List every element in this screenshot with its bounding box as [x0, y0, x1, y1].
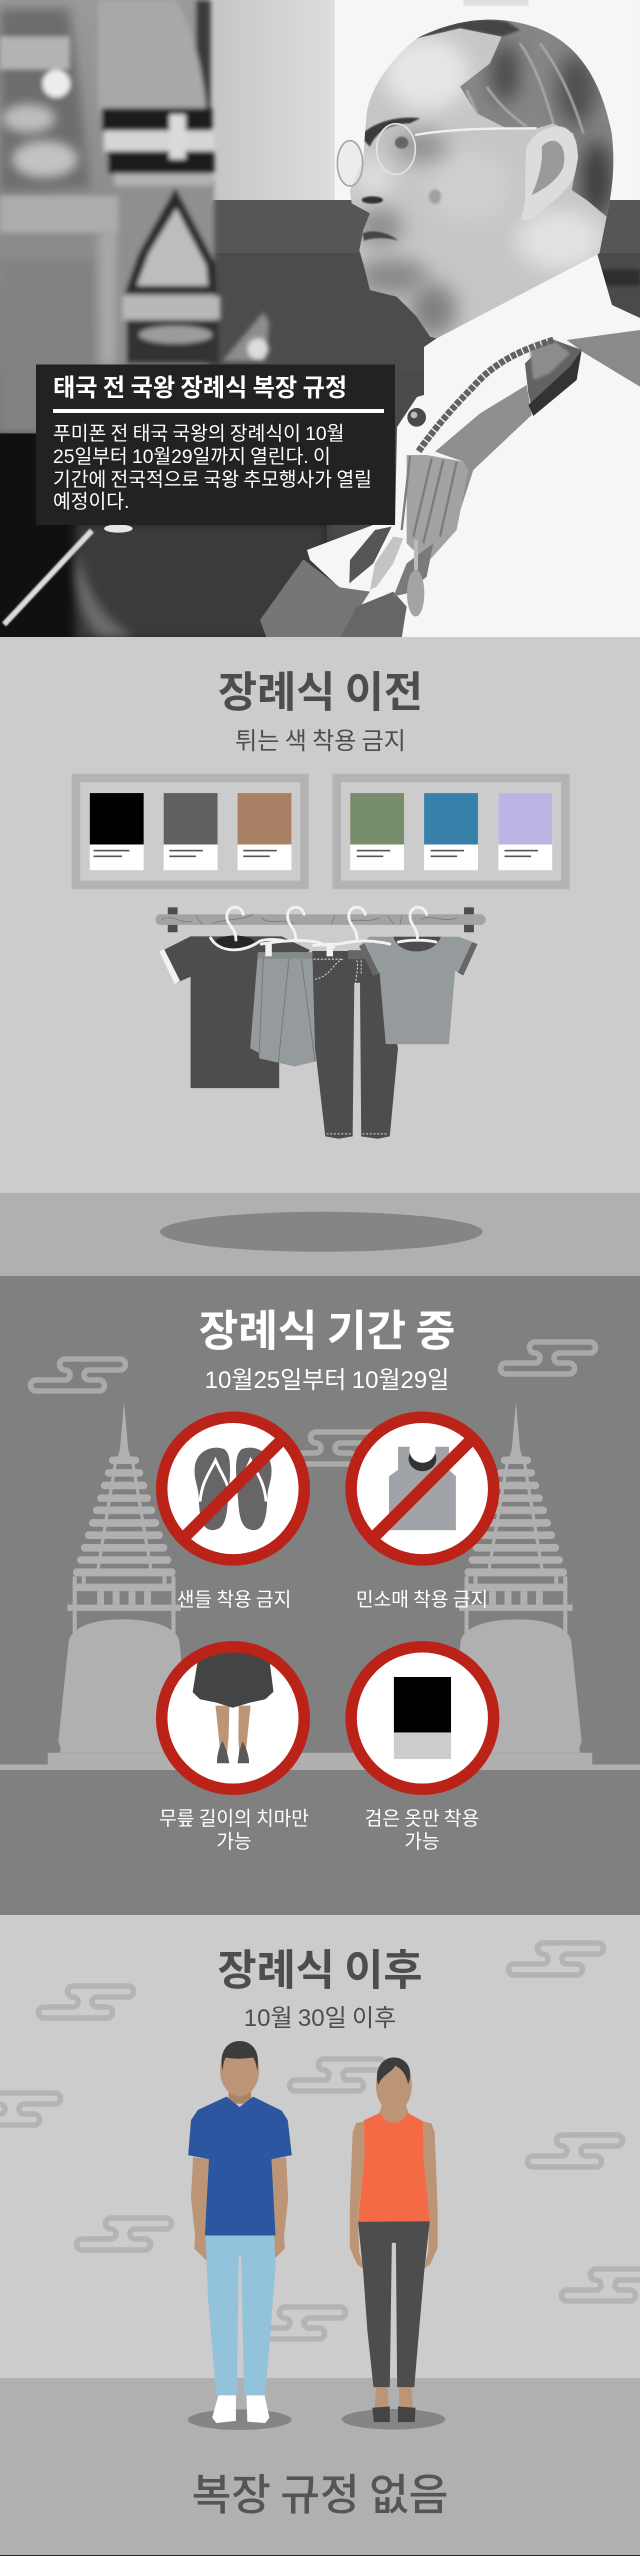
black t-shirt	[162, 936, 310, 1088]
footer: no dress code: 복장 규정 없음	[192, 2472, 448, 2520]
photo: blurred guard figure at left	[0, 0, 269, 433]
heading: after the funeral: 장례식 이후	[217, 1948, 423, 1995]
label: no sandals: 샌들 착용 금지	[177, 1589, 291, 1611]
photo: king white uniform	[307, 253, 640, 638]
heading: during the funeral: 장례식 기간 중	[199, 1308, 455, 1356]
caption body text: 예정이다.	[53, 491, 129, 513]
photo: dark lower left with sword streak	[0, 433, 329, 641]
subheading: dates: 10월25일부터 10월29일	[205, 1367, 449, 1394]
subheading: from 30 October: 10월 30일 이후	[244, 2005, 396, 2032]
caption body text: 25일부터 10월29일까지 열린다. 이	[53, 446, 331, 468]
floor shadow	[160, 1212, 483, 1252]
label: black clothes only	[365, 1808, 479, 1853]
illustration: man in blue shirt	[188, 2041, 292, 2430]
white hangers	[211, 907, 436, 950]
icon: no sleeveless tops	[350, 1417, 494, 1561]
label: no sleeveless: 민소매 착용 금지	[356, 1589, 488, 1611]
photo: king head with glasses	[337, 19, 613, 338]
panel: before the funeral	[0, 637, 640, 1276]
grey t-shirt	[359, 937, 478, 1044]
photo: sash, medals and chain	[260, 330, 640, 638]
icon: black clothes allowed	[350, 1646, 494, 1790]
clouds	[30, 1342, 596, 1464]
glasses	[415, 128, 537, 135]
dark jeans	[312, 950, 398, 1139]
panel: after the funeral	[0, 1915, 640, 2556]
icon: knee length skirt allowed	[161, 1646, 305, 1790]
illustration: clothes on a rail	[156, 907, 486, 1139]
photo: King Bhumibol portrait in black and white	[0, 0, 640, 641]
ear	[522, 126, 578, 220]
caption body text	[53, 423, 372, 513]
caption body text: 기간에 전국적으로 국왕 추모행사가 열릴	[53, 469, 372, 491]
label: black clothes only: 가능	[404, 1831, 440, 1853]
photo background wall	[206, 0, 640, 286]
label: knee length skirt only: 가능	[216, 1831, 252, 1853]
colour swatch frames	[76, 778, 565, 885]
label: knee length skirt only	[159, 1808, 309, 1853]
illustration: woman in orange top	[342, 2058, 445, 2430]
clouds	[0, 1943, 640, 2339]
heading: before the funeral: 장례식 이전	[218, 670, 423, 717]
temple backdrop and ground	[0, 1402, 640, 1770]
subheading: no bright colours: 튀는 색 착용 금지	[235, 728, 406, 755]
label: black clothes only: 검은 옷만 착용	[365, 1808, 479, 1830]
clothes rail	[156, 907, 486, 932]
panel: during the funeral	[0, 1276, 640, 1915]
icon: no sandals	[161, 1417, 305, 1561]
caption box: funeral dress code	[36, 364, 395, 525]
caption body text: 푸미폰 전 태국 국왕의 장례식이 10월	[53, 423, 344, 445]
hair	[417, 20, 613, 217]
label: knee length skirt only: 무릎 길이의 치마만	[159, 1808, 309, 1830]
grey skirt	[250, 952, 316, 1067]
caption heading: 태국 전 국왕 장례식 복장 규정	[53, 375, 347, 402]
